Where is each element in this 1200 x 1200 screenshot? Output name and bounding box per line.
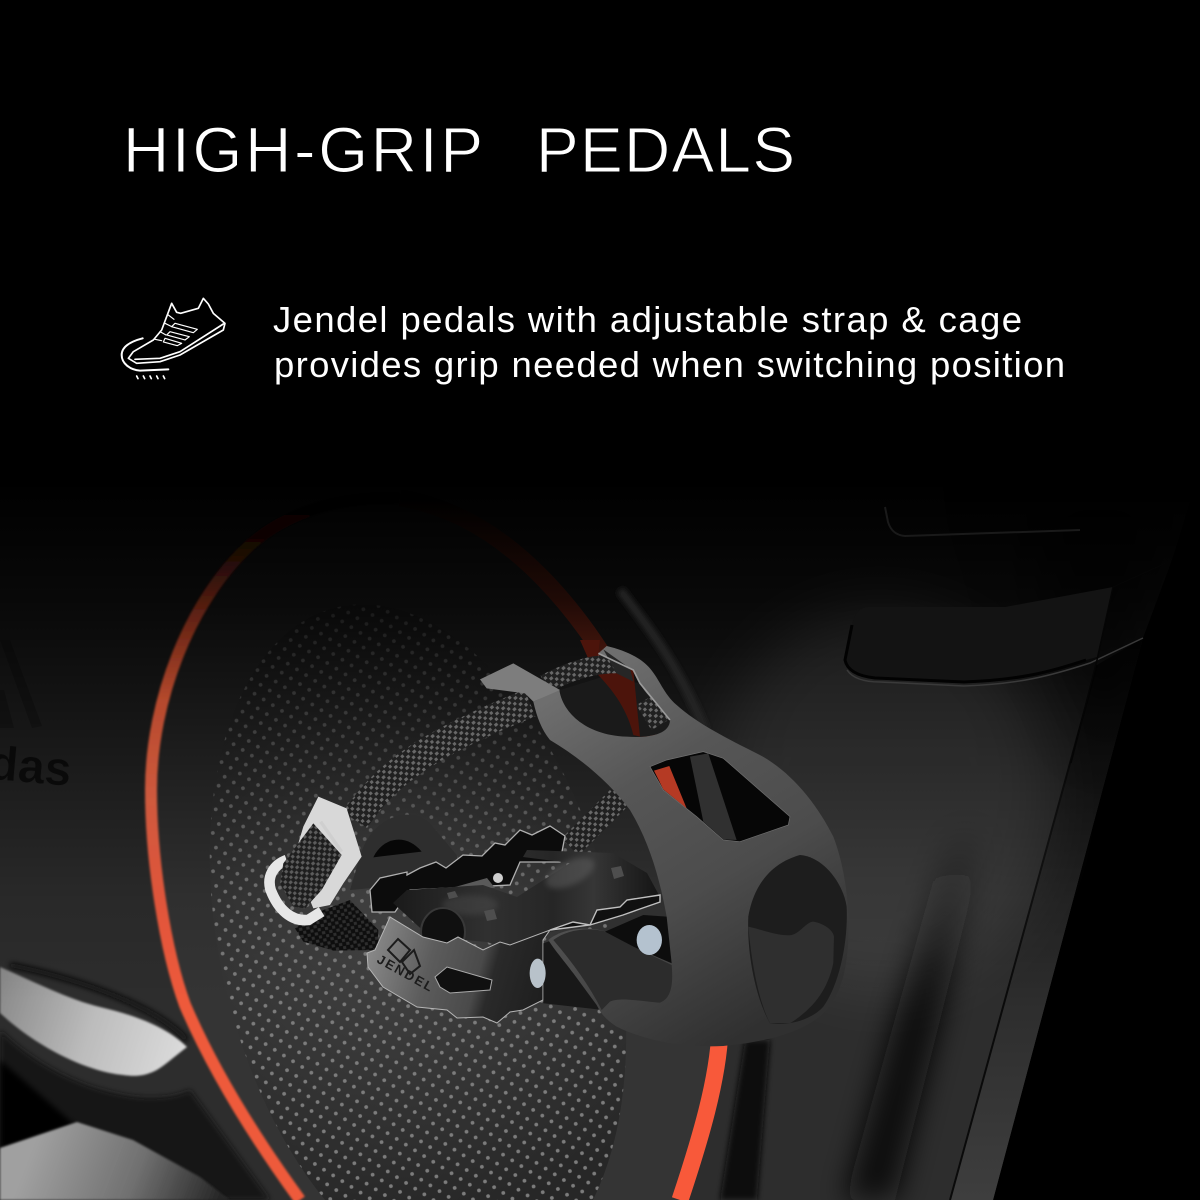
plate slot xyxy=(435,967,492,993)
plate logo diamonds xyxy=(388,939,420,974)
black recess xyxy=(605,915,672,963)
light shape lower left xyxy=(0,967,187,1076)
handle recess xyxy=(845,563,1166,763)
inner seat surface xyxy=(748,922,834,1023)
icon: running shoe xyxy=(122,298,225,379)
shoe stripes xyxy=(163,323,197,346)
cage xyxy=(480,646,849,1046)
rear toothed plate xyxy=(370,826,565,912)
cage slot xyxy=(603,649,633,682)
cage body xyxy=(533,646,849,1046)
perforated panel xyxy=(210,604,626,1200)
upper body panel xyxy=(885,507,1080,536)
column seen through window xyxy=(690,753,737,840)
light base block lower left xyxy=(0,1122,230,1200)
red seen through window xyxy=(654,766,687,808)
column glow xyxy=(710,610,1050,990)
title xyxy=(123,114,795,186)
oval window view xyxy=(748,855,847,1024)
wheel housing tint xyxy=(151,498,720,1200)
front plate xyxy=(367,917,550,1023)
black recess lower left xyxy=(0,1060,75,1150)
right side vignette xyxy=(1000,470,1200,750)
red ring through arch xyxy=(580,640,640,737)
title: PEDALS xyxy=(536,114,795,186)
plate hole xyxy=(493,873,503,883)
column side stripe xyxy=(950,638,1143,1200)
shoe outline xyxy=(128,298,225,363)
housing highlight arc xyxy=(620,590,705,730)
column shading xyxy=(720,820,990,1200)
screw xyxy=(637,925,662,955)
right plate teeth xyxy=(550,895,660,930)
plate mark: JENDEL xyxy=(375,952,437,995)
lip recess xyxy=(553,929,672,1010)
rubber highlight xyxy=(541,851,599,895)
dark band below light shape xyxy=(0,1030,270,1200)
arch strap strand xyxy=(645,700,660,725)
slot rim xyxy=(598,653,670,720)
main strap xyxy=(355,703,530,820)
red ring right xyxy=(400,498,720,1200)
description text: Jendel pedals with adjustable strap & cage xyxy=(273,299,1022,340)
buckle bar xyxy=(321,822,342,852)
stripe seam xyxy=(950,665,1097,1200)
description text: provides grip needed when switching position xyxy=(274,344,1065,385)
grip dashes xyxy=(137,376,165,379)
description text xyxy=(273,299,1065,385)
hub behind pedal xyxy=(350,815,463,890)
axle bearing xyxy=(421,908,465,956)
d-ring xyxy=(270,860,322,920)
sole line xyxy=(135,324,223,359)
arch view through cage xyxy=(560,640,670,737)
red ring left xyxy=(151,498,400,1200)
fade body to black at top xyxy=(0,460,1200,1005)
buckled strap xyxy=(280,823,342,908)
cage top loop xyxy=(480,663,560,702)
bike body xyxy=(0,470,1200,1200)
pedal rubber body xyxy=(393,850,660,950)
plate gap highlight xyxy=(455,878,495,888)
title: HIGH-GRIP xyxy=(123,114,483,186)
rubber highlight lower xyxy=(442,895,498,915)
buckle strap xyxy=(270,797,362,920)
strap tail xyxy=(295,900,378,951)
adidas logo embossed xyxy=(0,640,74,797)
motion arc xyxy=(122,338,168,371)
bracket and side bolt xyxy=(530,940,603,1010)
upper strap xyxy=(545,664,630,684)
shadow above light shape xyxy=(10,965,187,1040)
rubber studs xyxy=(447,866,624,921)
buckle frame xyxy=(293,797,362,908)
rear strap strand xyxy=(570,790,627,847)
window view xyxy=(650,752,790,842)
lace marks xyxy=(155,315,174,341)
